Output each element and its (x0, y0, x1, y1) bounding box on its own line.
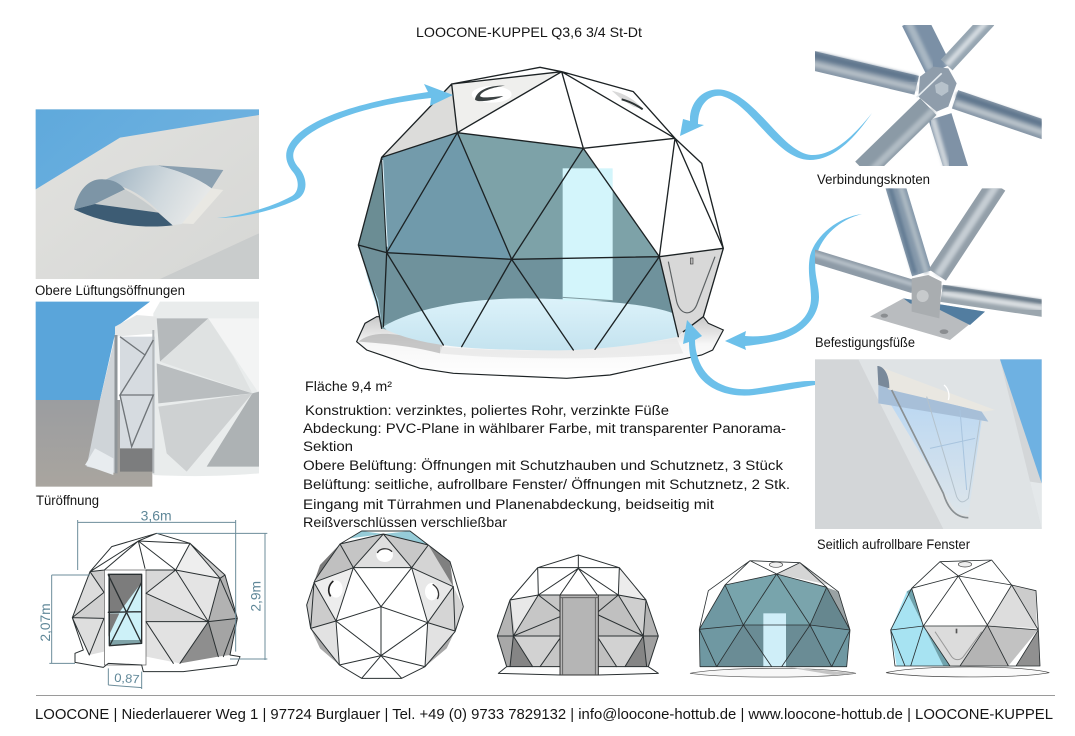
photo: connection node (815, 25, 1042, 166)
entrance line 2: Reißverschlüssen verschließbar (303, 515, 508, 530)
construction: Konstruktion: verzinktes, poliertes Rohr, verzinkte Füße (305, 403, 669, 418)
photo: upper ventilation opening (36, 109, 259, 279)
roof vent openings (472, 86, 643, 109)
vents (329, 548, 439, 600)
entrance line 1: Eingang mit Türrahmen und Planenabdeckung, beidseitig mit (303, 497, 714, 512)
title: LOOCONE-KUPPEL Q3,6 3/4 St-Dt (416, 24, 642, 40)
dimensioned door-side dome (37, 507, 267, 689)
cover line 1: Abdeckung: PVC-Plane in wählbarer Farbe, mit transparenter Panorama- (303, 421, 786, 436)
gray panels (382, 84, 457, 157)
cover line 2: Sektion (303, 439, 353, 454)
ventilation: Belüftung: seitliche, aufrollbare Fenster/ Öffnungen mit Schutznetz, 2 Stk. (303, 477, 790, 492)
foot tubes (813, 185, 1043, 308)
bracket (912, 275, 942, 318)
footer contact line: LOOCONE | Niederlauerer Weg 1 | 97724 Burglauer | Tel. +49 (0) 9733 7829132 | info@loocone-hottub.de | www.loocone-hottub.de | LOOCONE-KUPPEL (35, 707, 1053, 723)
side window outline (668, 257, 715, 313)
arrow: connection node (680, 89, 872, 160)
arrow: side window (683, 320, 863, 400)
dimension labels: 3,6m (141, 507, 172, 523)
area: Fläche 9,4 m² (305, 379, 393, 394)
photo: door opening (36, 302, 259, 487)
product description text (303, 379, 790, 530)
caption: Verbindungsknoten: Verbindungsknoten (817, 172, 930, 187)
door (104, 570, 146, 665)
front view dome with door (497, 555, 658, 675)
dome skirt (357, 317, 723, 378)
caption: Türöffnung: Türöffnung (36, 493, 99, 508)
connector tubes (810, 20, 1047, 173)
dimensioned door-side dome: 0,87 (114, 671, 140, 686)
dimension lines (49, 520, 267, 689)
upper ventilation: Obere Belüftung: Öffnungen mit Schutzhauben und Schutznetz, 3 Stück (303, 458, 783, 473)
arrow: mounting foot (725, 214, 862, 350)
photo: mounting foot (813, 185, 1043, 340)
caption: Obere Lüftungsöffnungen: Obere Lüftungsöffnungen (35, 283, 185, 298)
main dome illustration (357, 67, 723, 378)
footer divider (36, 694, 1055, 696)
hub and bolt (918, 67, 957, 112)
caption: Befestigungsfüße: Befestigungsfüße (815, 335, 915, 350)
base plate (870, 298, 985, 340)
teal transparent dome (690, 561, 856, 677)
door panel (560, 595, 598, 675)
dimensioned door-side dome: 2,9m (248, 581, 264, 612)
photo: roll-up side window (815, 359, 1042, 529)
side window dome (886, 560, 1049, 677)
caption: Seitlich aufrollbare Fenster: Seitlich aufrollbare Fenster (817, 537, 970, 552)
frame lines (358, 67, 723, 350)
arrow: roof vent (217, 84, 453, 218)
transparent panorama section (358, 133, 678, 350)
dimensioned door-side dome: 2,07m (37, 603, 53, 642)
dome body panels (358, 67, 723, 350)
top view dome (307, 531, 463, 678)
